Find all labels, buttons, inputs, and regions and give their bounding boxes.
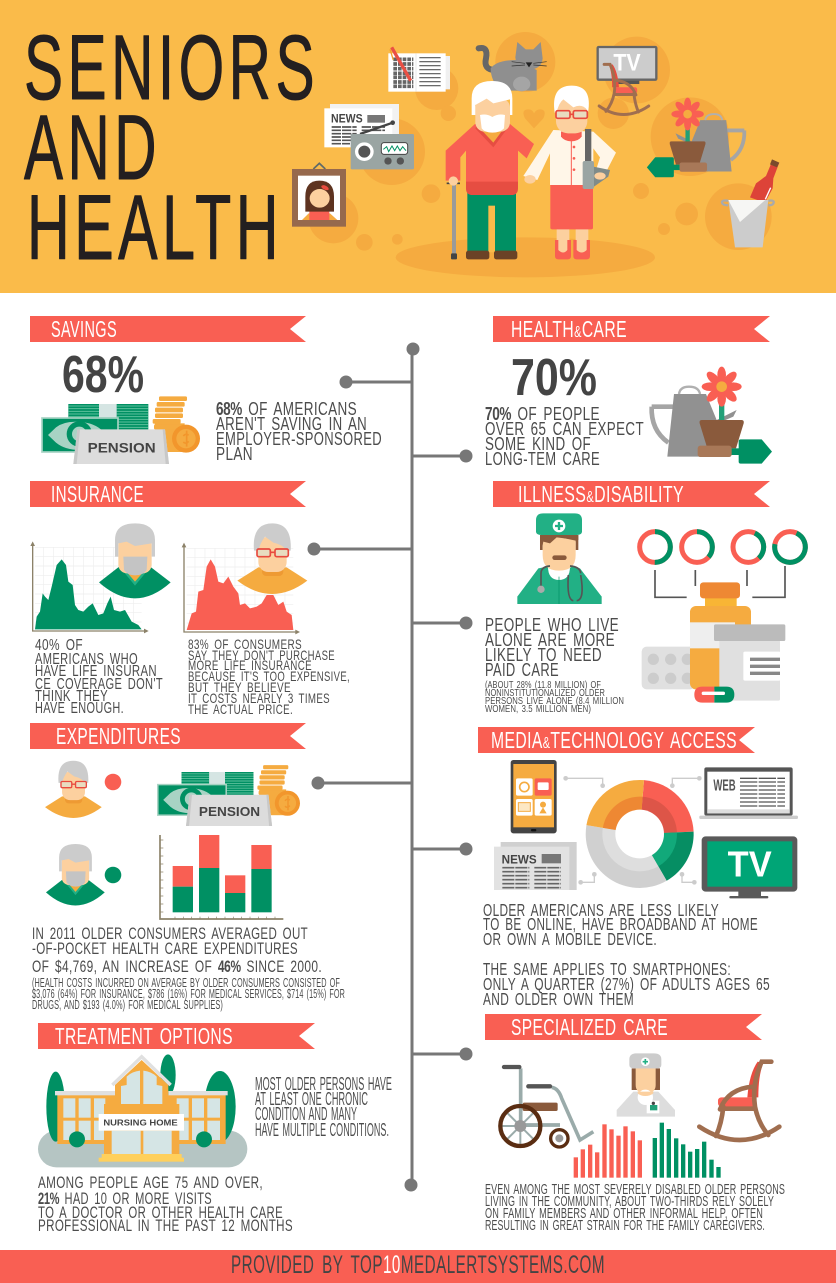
text: older americans online: OR OWN A MOBILE DEVICE. <box>483 929 657 949</box>
text: health cost breakdown: $3,076 (64%) FOR INSURANCE, $786 (16%) FOR MEDICAL SERVICES, $714 (15%) FOR <box>32 987 345 1001</box>
text: smartphones <box>483 959 770 1009</box>
title: AND <box>24 97 161 199</box>
text: life insurance coverage: THINK THEY <box>35 688 108 705</box>
icon: television: TV <box>613 50 641 77</box>
text: life insurance price: BECAUSE IT'S TOO EXPENSIVE, <box>188 668 350 684</box>
panel: treatment options <box>38 1023 392 1235</box>
text: chronic conditions: HAVE MULTIPLE CONDITIONS. <box>255 1120 389 1140</box>
text: living alone statistics: (ABOUT 28% (11.8 MILLION) OF <box>485 679 601 691</box>
text: life insurance coverage <box>35 637 163 717</box>
panel: insurance <box>30 481 350 717</box>
text: long-term care: 70% OF PEOPLE <box>485 403 600 424</box>
text: health cost breakdown: DRUGS, AND $193 (4.0%) FOR MEDICAL SUPPLIES) <box>32 998 223 1012</box>
text: savings: PLAN <box>216 443 253 464</box>
icon: radio <box>351 120 414 169</box>
text: family caregivers <box>485 1181 785 1234</box>
icon: crossword <box>388 47 450 92</box>
text: living alone statistics: PERSONS LIVE ALONE (8.4 MILLION <box>485 695 624 707</box>
text: living alone statistics: WOMEN, 3.5 MILLION MEN) <box>485 703 591 715</box>
icon: wheelchair <box>500 1067 593 1147</box>
panel: media and technology access <box>478 727 798 1009</box>
bust: older woman <box>237 523 307 594</box>
banner: health and care: HEALTH&CARE <box>511 316 627 342</box>
header background <box>0 0 836 293</box>
icon: medicine <box>642 582 785 703</box>
text: life insurance price: THE ACTUAL PRICE. <box>188 701 293 717</box>
donut chart <box>586 780 694 888</box>
icon: newspaper: NEWS <box>502 852 537 866</box>
icon: wine bucket <box>722 159 779 247</box>
text: doctor visits: TO A DOCTOR OR OTHER HEALTH CARE <box>38 1203 283 1222</box>
banner: treatment options: TREATMENT OPTIONS <box>55 1023 233 1049</box>
text: doctor visits <box>38 1173 293 1235</box>
text: life insurance coverage: CE COVERAGE DON'T <box>35 676 163 693</box>
banner: specialized care: SPECIALIZED CARE <box>511 1014 668 1040</box>
banner: health and care <box>493 316 770 342</box>
figure: woman <box>523 86 616 259</box>
text: chronic conditions: MOST OLDER PERSONS HAVE <box>255 1074 392 1094</box>
footer <box>0 1250 836 1283</box>
text: people living alone: PEOPLE WHO LIVE <box>485 614 619 635</box>
text: doctor visits: AMONG PEOPLE AGE 75 AND OVER, <box>38 1173 263 1192</box>
decorative bubbles <box>308 32 772 277</box>
text: life insurance price: BUT THEY BELIEVE <box>188 679 291 695</box>
icon: television <box>702 836 797 898</box>
icon: nursing home: NURSING HOME <box>103 1118 178 1128</box>
text: people living alone: ALONE ARE MORE <box>485 629 615 650</box>
text: people living alone: PAID CARE <box>485 659 559 680</box>
bust: older man <box>99 523 171 598</box>
text: health cost breakdown <box>32 976 345 1012</box>
text: expenditures <box>32 924 322 976</box>
bust: woman with legend dot <box>45 761 121 818</box>
text: long-term care: OVER 65 CAN EXPECT <box>485 418 644 439</box>
icon: newspaper <box>324 104 399 147</box>
text: living alone statistics <box>485 679 624 715</box>
icon: nursing home <box>38 1054 247 1167</box>
footer: PROVIDED BY TOP10MEDALERTSYSTEMS.COM <box>231 1251 605 1279</box>
icon: pension and money: PENSION <box>88 440 156 456</box>
icon: television <box>598 47 656 84</box>
icon: newspaper: NEWS <box>331 113 363 126</box>
text: chronic conditions: CONDITION AND MANY <box>255 1104 357 1124</box>
text: people living alone <box>485 614 619 680</box>
stacked bar chart <box>160 835 283 919</box>
area chart: green <box>30 541 149 633</box>
banner: savings <box>30 316 306 342</box>
stat: 70%: 70% <box>511 349 597 407</box>
icon: garden tools <box>652 367 772 464</box>
text: life insurance price: SAY THEY DON'T PURCHASE <box>188 647 335 663</box>
icon: pension and money <box>42 396 200 464</box>
icon: television: TV <box>728 844 772 885</box>
text: long-term care <box>485 403 644 469</box>
timeline <box>308 342 472 1192</box>
text: expenditures: -OF-POCKET HEALTH CARE EXPENDITURES <box>32 939 298 958</box>
title: HEALTH <box>27 177 283 279</box>
text: life insurance coverage: HAVE LIFE INSURAN <box>35 663 157 680</box>
banner: insurance: INSURANCE <box>51 481 144 507</box>
icon: nurse <box>617 1053 675 1117</box>
text: savings: 68% OF AMERICANS <box>216 398 357 419</box>
panel: specialized care <box>485 1014 785 1234</box>
title: SENIORS <box>24 17 319 119</box>
panel: expenditures <box>30 723 345 1012</box>
area chart: red <box>182 543 300 634</box>
icon: newspaper <box>494 842 577 890</box>
connector lines <box>563 776 702 885</box>
text: health cost breakdown: (HEALTH COSTS INCURRED ON AVERAGE BY OLDER CONSUMERS CONSISTED OF <box>32 976 340 990</box>
text: doctor visits: PROFESSIONAL IN THE PAST 12 MONTHS <box>38 1216 293 1235</box>
text: older americans online: OLDER AMERICANS ARE LESS LIKELY <box>483 900 719 920</box>
text: savings: EMPLOYER-SPONSORED <box>216 428 382 449</box>
text: life insurance coverage: HAVE ENOUGH. <box>35 700 124 717</box>
stat: 68%: 68% <box>62 346 144 404</box>
text: life insurance price <box>188 636 350 717</box>
banner: illness and disability: ILLNESS&DISABILITY <box>518 481 684 507</box>
text: people living alone: LIKELY TO NEED <box>485 644 602 665</box>
banner: savings: SAVINGS <box>51 316 117 342</box>
bust: man with legend dot <box>46 844 121 906</box>
text: life insurance coverage: AMERICANS WHO <box>35 651 138 668</box>
text: chronic conditions <box>255 1074 392 1140</box>
bar chart: green <box>653 1123 721 1178</box>
icon: tablet <box>511 760 557 833</box>
banner: insurance <box>30 481 306 507</box>
text: savings <box>216 398 382 464</box>
banner: expenditures: EXPENDITURES <box>56 723 181 749</box>
bar chart: red <box>574 1124 642 1178</box>
icon: pension and money: PENSION <box>199 805 260 819</box>
text: living alone statistics: NONINSTITUTIONALIZED OLDER <box>485 687 605 699</box>
icon: laptop <box>699 767 798 819</box>
text: life insurance price: IT COSTS NEARLY 3 TIMES <box>188 690 330 706</box>
text: life insurance price: MORE LIFE INSURANCE <box>188 657 312 673</box>
text: older americans online <box>483 900 758 949</box>
text: life insurance price: 83% OF CONSUMERS <box>188 636 302 652</box>
banner: expenditures <box>30 723 306 749</box>
text: smartphones: AND OLDER OWN THEM <box>483 989 634 1009</box>
icon: portrait <box>292 163 346 227</box>
icon: nurse <box>517 513 602 604</box>
panel: illness and disability <box>485 481 810 715</box>
panel: health and care <box>485 316 772 469</box>
icon: garden tools <box>647 98 744 177</box>
title <box>24 17 319 279</box>
panel: savings <box>30 316 382 464</box>
icon: pension and money <box>158 765 300 826</box>
banner: media and technology: MEDIA&TECHNOLOGY ACCESS <box>491 727 737 753</box>
icon: rocking chair <box>599 64 649 115</box>
text: expenditures: IN 2011 OLDER CONSUMERS AVERAGED OUT <box>32 924 308 943</box>
text: savings: AREN'T SAVING IN AN <box>216 413 367 434</box>
text: chronic conditions: AT LEAST ONE CHRONIC <box>255 1089 368 1109</box>
text: life insurance coverage: 40% OF <box>35 637 83 654</box>
text: doctor visits: 21% HAD 10 OR MORE VISITS <box>38 1189 212 1208</box>
icons: nurse, donuts and medicine <box>517 513 810 703</box>
illustrations: care equipment <box>500 1053 779 1178</box>
icon: cat <box>479 42 547 91</box>
text: expenditures: OF $4,769, AN INCREASE OF 46% SINCE 2000. <box>32 957 322 976</box>
icon: laptop: WEB <box>713 778 736 795</box>
charts: area charts with busts <box>30 523 307 634</box>
donut icons <box>640 527 810 567</box>
figure: man <box>446 81 534 259</box>
text: long-term care: LONG-TEM CARE <box>485 448 600 469</box>
illustration: media devices and donut <box>494 760 798 898</box>
icon: rocking chair <box>699 1062 779 1140</box>
text: long-term care: SOME KIND OF <box>485 433 591 454</box>
header illustration <box>292 32 779 277</box>
